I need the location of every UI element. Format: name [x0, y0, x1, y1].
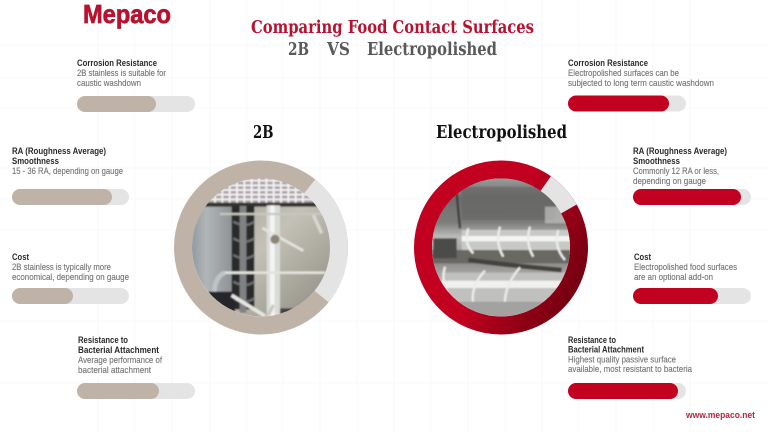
- panel: electropolished cost: are an optional add-on: [634, 272, 713, 282]
- panel: 2B smoothness: RA (Roughness Average): [12, 146, 106, 156]
- subtitle: 2B: [288, 40, 309, 60]
- panel: 2B bacterial attachment: bacterial attachment: [78, 365, 152, 375]
- donut ring: electropolished: [423, 170, 579, 326]
- title: Comparing Food Contact Surfaces: [251, 18, 534, 38]
- panel: electropolished corrosion resistance: [568, 58, 714, 112]
- panel: electropolished smoothness: Commonly 12 RA or less,: [633, 166, 719, 176]
- panel: electropolished bacterial attachment: [568, 335, 692, 399]
- panel: 2B cost: Cost: [12, 252, 29, 262]
- panel: 2B cost: 2B stainless is typically more: [12, 262, 111, 272]
- panel: electropolished smoothness: [633, 146, 751, 205]
- panel: electropolished bacterial attachment: available, most resistant to bacteria: [568, 364, 692, 374]
- photo: 2B mixer interior: [188, 177, 335, 320]
- website url: www.mepaco.net: [685, 410, 755, 420]
- panel: electropolished smoothness: Smoothness: [633, 156, 680, 166]
- panel: 2B corrosion resistance: Corrosion Resistance: [77, 58, 157, 68]
- panel: electropolished cost: [633, 252, 751, 304]
- panel: electropolished bacterial attachment: Bacterial Attachment: [568, 344, 644, 354]
- heading: 2B: 2B: [253, 123, 274, 143]
- panel: 2B bacterial attachment: [77, 335, 195, 399]
- panel: 2B smoothness: 15 - 36 RA, depending on gauge: [12, 166, 123, 176]
- heading: Electropolished: Electropolished: [436, 123, 567, 143]
- subtitle: [288, 40, 497, 60]
- panel: 2B smoothness: Smoothness: [12, 156, 59, 166]
- panel: electropolished corrosion resistance: Corrosion Resistance: [568, 58, 648, 68]
- panel: 2B bacterial attachment: Resistance to: [78, 335, 129, 345]
- panel: 2B cost: [12, 252, 129, 304]
- panel: electropolished cost: Cost: [634, 252, 651, 262]
- panel: 2B corrosion resistance: [77, 58, 195, 112]
- panel: 2B corrosion resistance: 2B stainless is suitable for: [77, 68, 166, 78]
- panel: electropolished corrosion resistance: Electropolished surfaces can be: [568, 68, 679, 78]
- panel: 2B smoothness: [12, 146, 129, 205]
- panel: electropolished smoothness: depending on gauge: [633, 176, 706, 186]
- panel: 2B bacterial attachment: Bacterial Attachment: [78, 345, 159, 355]
- panel: electropolished bacterial attachment: Resistance to: [568, 335, 617, 345]
- photo: electropolished auger: [428, 177, 575, 320]
- subtitle: VS: [326, 40, 350, 60]
- panel: 2B bacterial attachment: Average performance of: [78, 355, 162, 365]
- panel: electropolished corrosion resistance: subjected to long term caustic washdown: [568, 78, 714, 88]
- panel: 2B corrosion resistance: caustic washdown: [77, 78, 141, 88]
- panel: 2B cost: economical, depending on gauge: [12, 272, 129, 282]
- panel: electropolished smoothness: RA (Roughness Average): [633, 146, 727, 156]
- donut ring: 2B: [183, 170, 339, 326]
- panel: electropolished bacterial attachment: Highest quality passive surface: [568, 354, 676, 364]
- subtitle: Electropolished: [367, 40, 497, 60]
- panel: electropolished cost: Electropolished food surfaces: [634, 262, 738, 272]
